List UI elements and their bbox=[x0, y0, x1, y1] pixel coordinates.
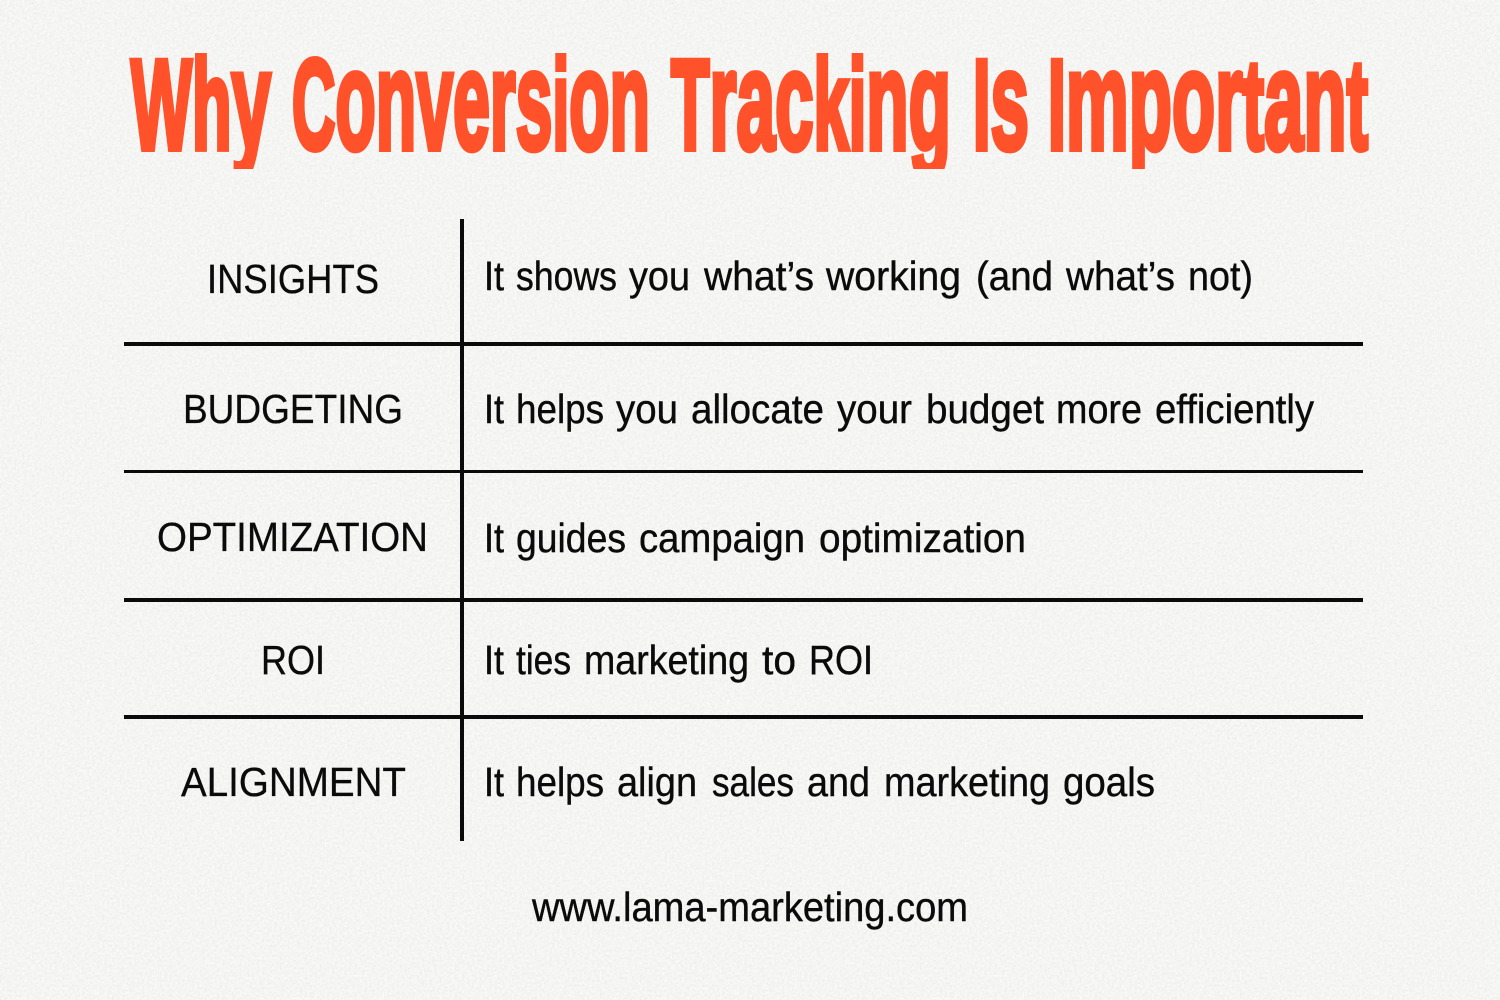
table bbox=[124, 219, 1363, 841]
row: budgeting: you bbox=[616, 386, 678, 432]
row: budgeting: your bbox=[837, 386, 912, 432]
row: budgeting: helps bbox=[516, 386, 604, 432]
title bbox=[129, 53, 1369, 169]
row: roi bbox=[261, 637, 873, 683]
row: budgeting: efficiently bbox=[1155, 386, 1314, 432]
row: insights: what’s bbox=[1065, 253, 1175, 299]
row: insights bbox=[207, 253, 1253, 302]
row: budgeting: more bbox=[1056, 386, 1142, 432]
row: roi: to bbox=[762, 637, 796, 683]
row: alignment: marketing bbox=[884, 759, 1050, 805]
row: budgeting: budget bbox=[926, 386, 1045, 432]
title: Important bbox=[1048, 21, 1368, 179]
row: alignment: sales bbox=[712, 759, 794, 805]
row: roi: ties bbox=[516, 637, 571, 683]
row: alignment: goals bbox=[1063, 759, 1155, 805]
row: optimization: campaign bbox=[639, 515, 805, 561]
title: Why bbox=[131, 21, 271, 179]
row: optimization: optimization bbox=[819, 515, 1026, 561]
row: roi: ROI bbox=[261, 637, 325, 683]
website footer: www.lama-marketing.com bbox=[531, 884, 968, 930]
row: alignment: ALIGNMENT bbox=[181, 759, 406, 805]
row: optimization bbox=[157, 514, 1026, 561]
title: Tracking bbox=[671, 21, 951, 179]
title: Is bbox=[973, 21, 1029, 179]
row: optimization: OPTIMIZATION bbox=[157, 514, 428, 560]
row: roi: ROI bbox=[809, 637, 873, 683]
row: insights: INSIGHTS bbox=[207, 256, 379, 302]
row: budgeting: It bbox=[484, 386, 505, 432]
vertical divider bbox=[460, 219, 464, 841]
row: alignment: align bbox=[617, 759, 697, 805]
row: insights: working bbox=[825, 253, 961, 299]
title: Conversion bbox=[292, 21, 650, 179]
row: optimization: It bbox=[484, 515, 505, 561]
row: roi: It bbox=[484, 637, 505, 683]
row: alignment: and bbox=[807, 759, 870, 805]
row: alignment bbox=[181, 759, 1155, 805]
row: insights: what’s bbox=[703, 253, 814, 299]
row: insights: not) bbox=[1188, 253, 1253, 299]
row: insights: It bbox=[484, 253, 505, 299]
row: roi: marketing bbox=[584, 637, 749, 683]
row: alignment: It bbox=[484, 759, 505, 805]
row: budgeting: BUDGETING bbox=[183, 386, 403, 432]
row: insights: you bbox=[629, 253, 690, 299]
row: insights: (and bbox=[976, 253, 1053, 299]
row divider lines bbox=[124, 342, 1363, 719]
row: optimization: guides bbox=[516, 515, 626, 561]
row: insights: shows bbox=[516, 253, 617, 299]
row: alignment: helps bbox=[516, 759, 604, 805]
row: budgeting: allocate bbox=[691, 386, 824, 432]
row: budgeting bbox=[183, 386, 1314, 432]
